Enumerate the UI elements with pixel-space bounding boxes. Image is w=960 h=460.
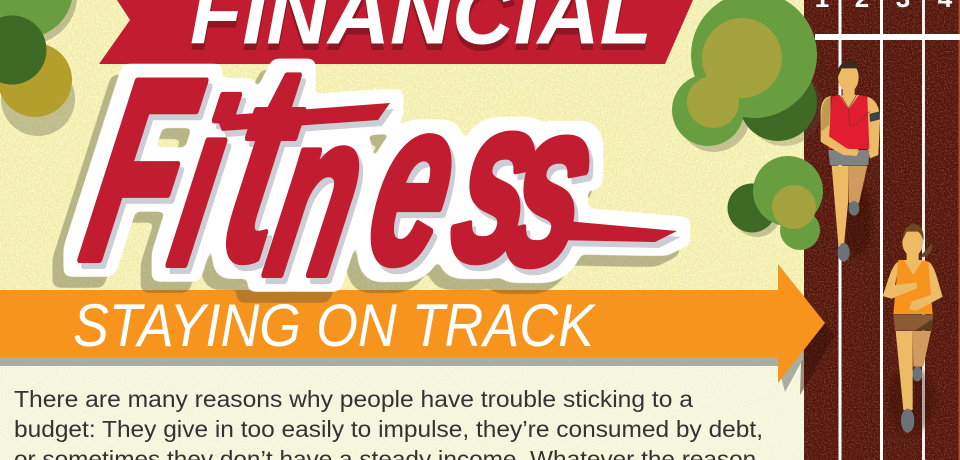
trees: upper right cluster	[672, 0, 823, 152]
arms and shoulders	[821, 96, 880, 158]
title: Fitness sticker lettering: i	[155, 54, 249, 314]
trees: top left	[0, 0, 77, 136]
rear leg and shoe	[912, 331, 931, 381]
tank top	[828, 95, 869, 149]
title: Fitness sticker lettering: t	[202, 5, 327, 318]
title: Fitness sticker lettering: s	[488, 53, 616, 313]
title: Fitness sticker lettering: F	[65, 26, 218, 315]
armband	[869, 111, 880, 122]
arrow shadow	[0, 340, 803, 392]
forearm	[822, 136, 859, 156]
intro paragraph: budget: They give in too easily to impulse, they’re consumed by debt,	[14, 416, 763, 442]
banner ribbon with heading FINANCIAL	[99, 0, 693, 69]
forearms	[883, 283, 943, 311]
running track	[804, 0, 960, 460]
runner: woman	[883, 224, 943, 433]
title: Fitness sticker lettering: n	[251, 64, 385, 324]
earphone cord	[842, 95, 870, 127]
title: Fitness sticker lettering	[63, 5, 677, 324]
title: Fitness sticker lettering: e	[351, 52, 478, 312]
trees: lower right cluster	[728, 156, 823, 250]
arrow shadow on track	[800, 300, 835, 395]
shorts	[893, 314, 933, 331]
neck and head	[902, 224, 924, 275]
front leg and shoe	[896, 331, 914, 433]
tank top	[893, 260, 933, 314]
intro paragraph: There are many reasons why people have trouble sticking to a	[14, 386, 693, 412]
runner: man	[821, 61, 880, 262]
lane numbers	[815, 0, 953, 13]
intro paragraph	[14, 386, 763, 460]
title: Fitness sticker lettering: s	[434, 49, 562, 309]
shorts	[828, 150, 869, 165]
background: lower pale panel	[0, 300, 806, 460]
ponytail	[920, 244, 933, 257]
arrow body	[0, 264, 825, 383]
background: upper cream panel	[0, 0, 806, 300]
rear leg and shoe	[848, 166, 867, 216]
arrow: STAYING ON TRACK	[0, 264, 835, 395]
subtitle: STAYING ON TRACK	[73, 292, 597, 359]
front leg and shoe	[832, 166, 850, 262]
neck and head	[838, 61, 860, 109]
arms	[883, 262, 943, 311]
